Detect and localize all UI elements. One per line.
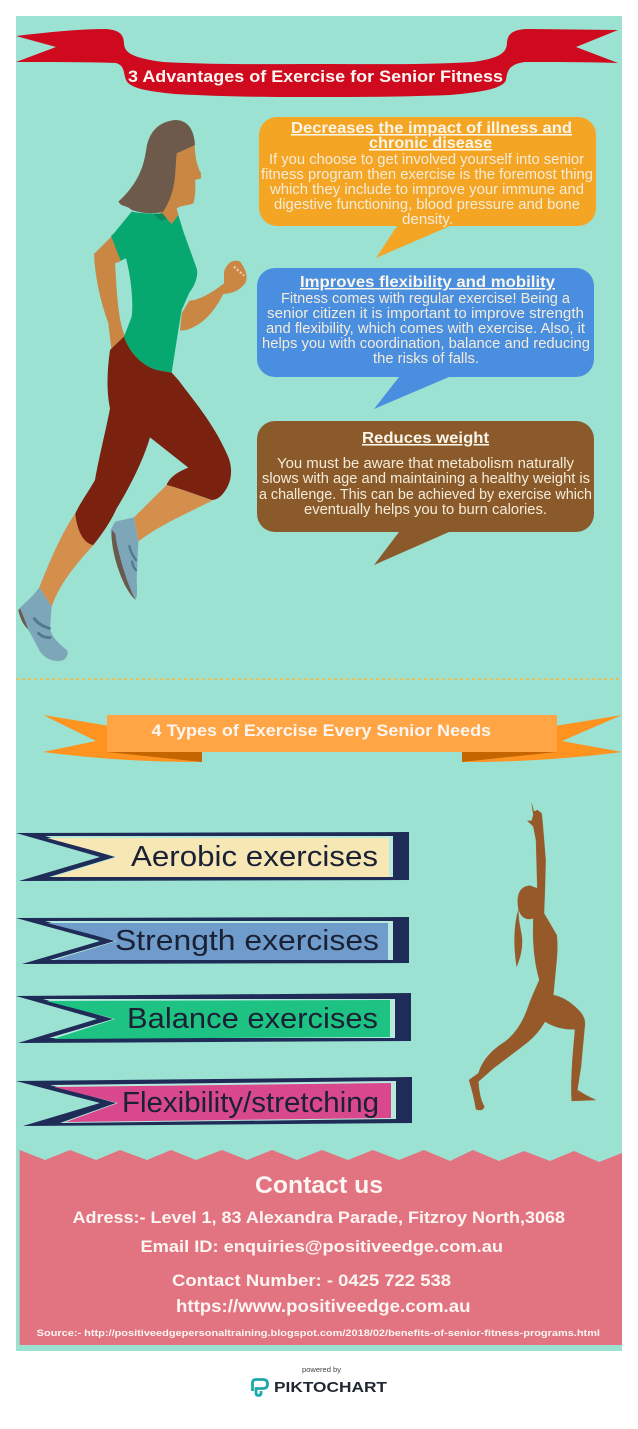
banner: aerobic	[16, 832, 409, 881]
logo icon	[252, 1380, 268, 1396]
bubble	[257, 268, 594, 409]
title ribbon	[16, 29, 618, 97]
powered by: powered by	[302, 1365, 341, 1374]
callout: reduces weight	[257, 421, 594, 565]
phone: Contact Number: - 0425 722 538	[172, 1271, 451, 1290]
runner figure	[18, 120, 247, 661]
banner: strength: Strength exercises	[115, 925, 379, 957]
body text	[261, 152, 593, 228]
back arm	[94, 236, 125, 352]
banner: flexibility: Flexibility/stretching	[122, 1087, 379, 1119]
banner: strength	[16, 917, 409, 964]
section ribbon	[43, 715, 622, 762]
source: Source:- http://positiveedgepersonaltraining.blogspot.com/2018/02/benefits-of-senior-fitness-programs.html	[37, 1328, 600, 1339]
banner: balance	[16, 993, 411, 1043]
body text	[259, 456, 592, 518]
front shoe	[111, 517, 138, 599]
bubble	[257, 421, 594, 565]
back shoe sole	[18, 608, 28, 629]
body text: Fitness comes with regular exercise! Being a	[281, 291, 570, 307]
wordmark: PIKTOCHART	[274, 1379, 387, 1396]
callout: illness and chronic disease	[259, 117, 596, 258]
front shoe sole	[112, 530, 136, 600]
piktochart logo	[252, 1365, 387, 1396]
callout: flexibility and mobility	[257, 268, 594, 409]
title text: 3 Advantages of Exercise for Senior Fitness	[128, 68, 503, 86]
body text: slows with age and maintaining a healthy weight is	[262, 471, 590, 487]
body text: digestive functioning, blood pressure and bone	[274, 197, 580, 213]
bubble	[259, 117, 596, 258]
heading line two: chronic disease	[369, 135, 492, 152]
body text: You must be aware that metabolism naturally	[277, 456, 575, 472]
front shoe stripes	[129, 546, 136, 570]
contact panel	[20, 1150, 622, 1345]
body text: the risks of falls.	[373, 351, 479, 367]
body text: which they include to improve your immune and	[269, 182, 584, 198]
back shoe stripes	[34, 619, 50, 638]
heading: Reduces weight	[362, 430, 489, 447]
body text: fitness program then exercise is the foremost thing	[261, 167, 593, 183]
yoga silhouette	[469, 803, 596, 1110]
knuckles	[234, 267, 244, 276]
body text	[262, 291, 590, 367]
body text: helps you with coordination, balance and reducing	[262, 336, 590, 352]
back calf	[39, 513, 95, 607]
body	[469, 803, 596, 1110]
face and neck	[160, 145, 201, 225]
collar shade	[153, 213, 167, 221]
body text: a challenge. This can be achieved by exercise which	[259, 487, 592, 503]
banner: balance: Balance exercises	[127, 1003, 378, 1035]
body text: eventually helps you to burn calories.	[304, 502, 547, 518]
lower body	[18, 337, 231, 661]
contact heading: Contact us	[255, 1172, 383, 1199]
front arm	[180, 261, 247, 331]
green shirt	[111, 212, 197, 373]
upper body	[94, 120, 247, 373]
body text: senior citizen it is important to improve strength	[267, 306, 584, 322]
maroon leggings	[75, 337, 231, 545]
back shoe	[18, 587, 68, 661]
banner: aerobic: Aerobic exercises	[131, 841, 378, 873]
hair	[118, 120, 195, 213]
ribbon folds	[107, 752, 557, 762]
email: Email ID: enquiries@positiveedge.com.au	[140, 1237, 503, 1256]
ribbon band	[107, 715, 557, 752]
address: Adress:- Level 1, 83 Alexandra Parade, Fitzroy North,3068	[72, 1208, 565, 1227]
section heading: 4 Types of Exercise Every Senior Needs	[152, 722, 491, 740]
body text: If you choose to get involved yourself into senior	[269, 152, 584, 168]
heading: Decreases the impact of illness and	[291, 120, 572, 137]
website: https://www.positiveedge.com.au	[176, 1296, 470, 1316]
front calf	[134, 485, 212, 542]
heading: Improves flexibility and mobility	[300, 274, 555, 291]
panel background	[20, 1150, 622, 1345]
body text: and flexibility, which comes with exercise. Also, it	[266, 321, 585, 337]
banner: flexibility	[16, 1077, 412, 1126]
ponytail	[515, 910, 522, 967]
ribbon tails	[43, 715, 622, 762]
body text: density.	[402, 212, 453, 228]
